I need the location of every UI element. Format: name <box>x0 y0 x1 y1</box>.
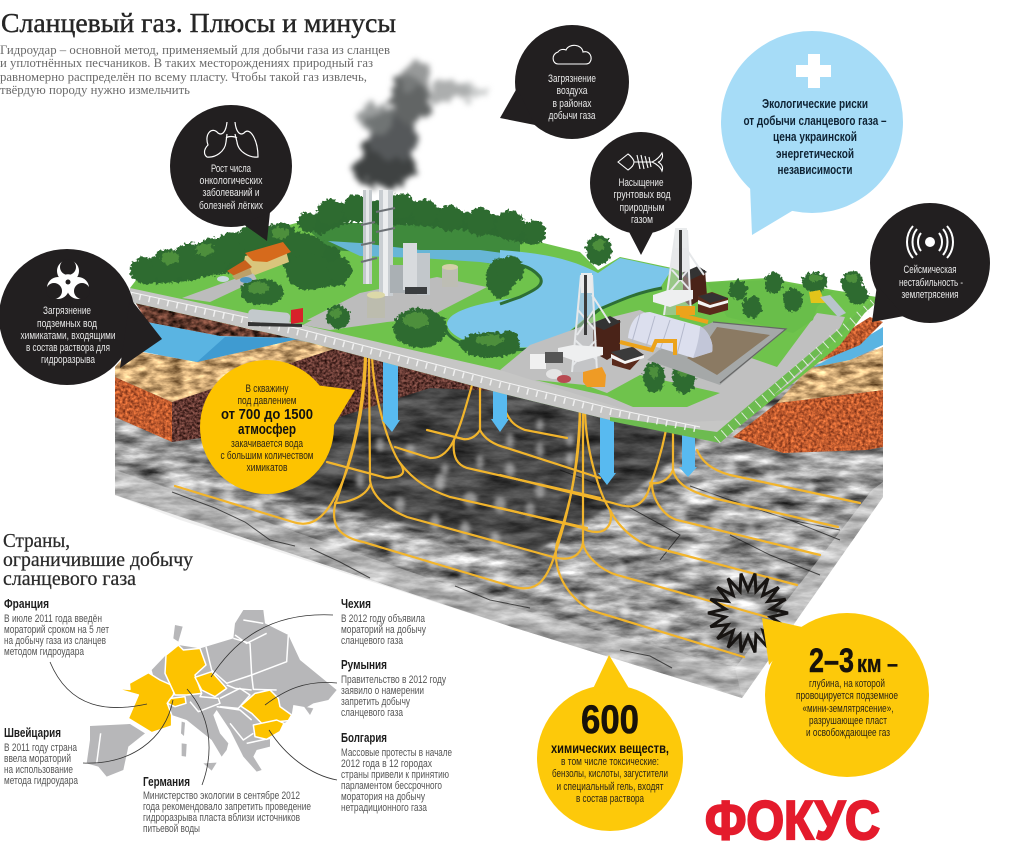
text: France: В июле 2011 года введён <box>4 613 102 625</box>
pond hedge <box>445 288 662 350</box>
callout: lungs: болезней лёгких <box>199 200 263 212</box>
vapour fracture puffs <box>200 419 845 648</box>
text: Germany: питьевой воды <box>143 823 200 835</box>
text: Germany: года рекомендовало запретить проведение <box>143 801 311 813</box>
block cross-section <box>100 298 900 710</box>
left tan rock <box>115 340 334 402</box>
text: Germany <box>143 774 311 835</box>
right curved road <box>500 310 845 423</box>
icon: seismic waves <box>907 226 953 258</box>
text: Czech Republic: сланцевого газа <box>341 635 404 647</box>
callout: air pollution <box>500 25 629 139</box>
callout: depth: глубина, на которой <box>809 678 885 690</box>
callout: main message: независимости <box>778 162 852 177</box>
callout: seismic: Сейсмическая <box>904 264 957 276</box>
callout: 600 chemicals: 600 <box>581 698 639 742</box>
callout: biohazard: подземных вод <box>37 318 97 330</box>
left red rock <box>136 303 290 338</box>
gravel main pad <box>307 277 487 322</box>
platform ground <box>130 222 877 442</box>
text: Bulgaria: страны привели к принятию <box>341 769 449 781</box>
callout: seismic <box>870 203 990 323</box>
orange pipes <box>620 308 708 355</box>
callout: fish <box>590 132 692 255</box>
callout: fish: природным <box>620 202 664 214</box>
callout: pressure: под давлением <box>238 395 296 407</box>
callout: lungs: онкологических <box>200 175 263 187</box>
left drilling rig <box>530 273 644 387</box>
leader lines <box>50 615 337 785</box>
text: Bulgaria: Болгария <box>341 730 387 745</box>
text: Romania <box>341 657 446 719</box>
callout: seismic: нестабильность - <box>899 277 963 289</box>
callout: 600 chemicals: в состав раствора <box>576 793 645 805</box>
gas plant with chimneys <box>361 190 458 318</box>
title: Сланцевый газ. Плюсы и минусы <box>1 8 396 38</box>
peninsula hedge <box>500 264 541 304</box>
callout: lungs: Рост числа <box>211 163 252 175</box>
callout: main message: от добычи сланцевого газа – <box>744 113 886 128</box>
heading: countries: Страны, <box>3 530 70 552</box>
callout: pressure <box>200 360 355 494</box>
callout: depth: км – <box>857 651 898 678</box>
shaded zone under platform <box>217 370 697 553</box>
intro text <box>0 43 390 97</box>
intro text: и уплотнённых песчаников. В таких месторождениях природный газ <box>0 56 373 70</box>
text: Germany: Министерство экологии в сентябре 2012 <box>143 790 300 802</box>
soil layer <box>172 349 491 442</box>
intro text: равномерно распределён по всему пласту. Чтобы такой газ извлечь, <box>0 70 367 84</box>
text: Czech Republic <box>341 596 426 647</box>
driveway <box>182 270 257 302</box>
right tan rock <box>777 347 883 403</box>
front grass <box>535 375 720 407</box>
country borders <box>97 620 288 763</box>
text: Switzerland <box>4 725 79 787</box>
callout: fish: газом <box>631 214 653 226</box>
blue water arrows <box>382 357 697 485</box>
callout: lungs <box>170 105 292 241</box>
callout: pressure: химикатов <box>246 462 288 474</box>
callout: main message: энергетической <box>776 146 854 161</box>
platform green rim <box>610 297 877 443</box>
callout: 600 chemicals <box>537 655 683 831</box>
house <box>217 242 291 283</box>
text: Bulgaria <box>341 730 452 814</box>
text: Czech Republic: В 2012 году объявила <box>341 613 426 625</box>
callout: seismic: землетрясения <box>902 289 959 301</box>
hedge masses <box>135 198 542 290</box>
right underground water <box>812 327 883 368</box>
text: Czech Republic: Чехия <box>341 596 371 611</box>
text: Bulgaria: 2012 года в 12 городах <box>341 758 432 770</box>
callout: biohazard: химикатами, входящими <box>20 330 116 342</box>
right red rock <box>818 317 883 362</box>
heading: countries <box>3 530 193 590</box>
icon: fish skeleton <box>618 153 663 171</box>
callout: biohazard <box>0 249 162 385</box>
front face strip <box>115 470 742 698</box>
callout: depth: и освобождающее газ <box>806 727 890 739</box>
text: Germany: Германия <box>143 774 190 789</box>
callout: depth: 2–3 <box>809 642 854 680</box>
highlighted countries <box>115 645 292 739</box>
text: Switzerland: Швейцария <box>4 725 61 740</box>
text: Switzerland: метода гидроудара <box>4 775 79 787</box>
callout: biohazard: гидроразрыва <box>41 354 96 366</box>
shale rock base <box>115 338 883 698</box>
text: France <box>4 596 109 658</box>
trees <box>130 193 869 394</box>
smoke plume <box>356 62 492 189</box>
callout: 600 chemicals: в том числе токсические: <box>561 756 659 768</box>
right rust layer <box>733 390 883 453</box>
callout: 600 chemicals: химических веществ, <box>551 740 669 756</box>
text: France: на добычу газа из сланцев <box>4 635 106 647</box>
text: Bulgaria: парламентом бессрочного <box>341 780 442 792</box>
text: Bulgaria: моратория на добычу <box>341 791 425 803</box>
callout: air pollution: в районах <box>552 98 592 110</box>
callout: depth <box>762 613 929 777</box>
right grass <box>707 280 833 333</box>
text: Romania: запретить добычу <box>341 696 410 708</box>
platform <box>130 193 877 443</box>
connecting gravel <box>303 293 387 330</box>
text: France: методом гидроудара <box>4 646 85 658</box>
back grass darker <box>300 222 520 262</box>
callout: pressure: от 700 до 1500 <box>221 406 313 423</box>
callout: 600 chemicals: бензолы, кислоты, загустители <box>552 768 668 780</box>
fence <box>130 292 877 440</box>
callout: biohazard: в состав раствора для <box>26 342 110 354</box>
rock cracks <box>172 470 850 668</box>
gray landmass <box>87 610 337 777</box>
settling pit <box>647 322 786 385</box>
callout: depth: провоцируется подземное <box>796 690 898 702</box>
heading: countries: ограничившие добычу <box>3 549 193 571</box>
text: Switzerland: ввела мораторий <box>4 753 71 765</box>
intro text: Гидроудар – основной метод, применяемый для добычи газа из сланцев <box>0 43 390 57</box>
text: Romania: сланцевого газа <box>341 707 404 719</box>
horizontal wells and pipes <box>175 357 860 657</box>
tanker truck <box>247 308 303 327</box>
callout: main message: Экологические риски <box>762 96 868 111</box>
text: Switzerland: В 2011 году страна <box>4 742 78 754</box>
callout: air pollution: добычи газа <box>548 110 596 122</box>
callout: air pollution: воздуха <box>556 85 588 97</box>
callout: pressure: В скважину <box>246 383 289 395</box>
callout: pressure: с большим количеством <box>220 450 314 462</box>
callout: fish: Насыщение <box>618 177 664 189</box>
left rust layer <box>115 377 172 442</box>
text: Germany: гидроразрыва пласта вблизи источников <box>143 812 300 824</box>
text: France: Франция <box>4 596 49 611</box>
callout: main message <box>721 31 903 235</box>
callout: fish: грунтовых вод <box>614 189 671 201</box>
icon: plus <box>796 54 831 88</box>
back pond <box>328 241 525 268</box>
left underground water <box>133 322 300 362</box>
heading: countries: сланцевого газа <box>3 568 136 590</box>
text: Bulgaria: Массовые протесты в начале <box>341 747 452 759</box>
text: Romania: Правительство в 2012 году <box>341 674 446 686</box>
callout: main message: цена украинской <box>773 129 857 144</box>
text: Switzerland: на использование <box>4 764 73 776</box>
text: Bulgaria: нетрадиционного газа <box>341 802 428 814</box>
callout: depth: разрушающее пласт <box>809 715 887 727</box>
callout: depth: «мини-землятрясение», <box>802 703 894 715</box>
right drilling rig <box>653 228 728 315</box>
text: Romania: заявило о намерении <box>341 685 424 697</box>
callout: biohazard: Загрязнение <box>43 305 91 317</box>
icon: biohazard <box>46 259 90 299</box>
explosion burst <box>708 574 788 652</box>
text: Romania: Румыния <box>341 657 387 672</box>
callout: 600 chemicals: и специальный гель, входят <box>556 781 664 793</box>
icon: lungs <box>204 122 258 157</box>
callout: air pollution: Загрязнение <box>548 73 596 85</box>
intro text: твёрдую породу нужно измельчить <box>0 83 190 97</box>
front road <box>130 288 733 442</box>
text: France: мораторий сроком на 5 лет <box>4 624 109 636</box>
icon: cloud <box>553 45 591 64</box>
logo: ФОКУС <box>705 789 880 851</box>
main pond <box>447 250 672 348</box>
map of Europe <box>87 610 337 777</box>
callout: lungs: заболеваний и <box>202 187 260 199</box>
storage hangar <box>628 312 712 358</box>
text: Czech Republic: мораторий на добычу <box>341 624 426 636</box>
callout: pressure: закачивается вода <box>231 438 304 450</box>
right face strip <box>735 482 883 698</box>
callout: pressure: атмосфер <box>238 421 296 438</box>
right yellow truck <box>809 290 846 317</box>
